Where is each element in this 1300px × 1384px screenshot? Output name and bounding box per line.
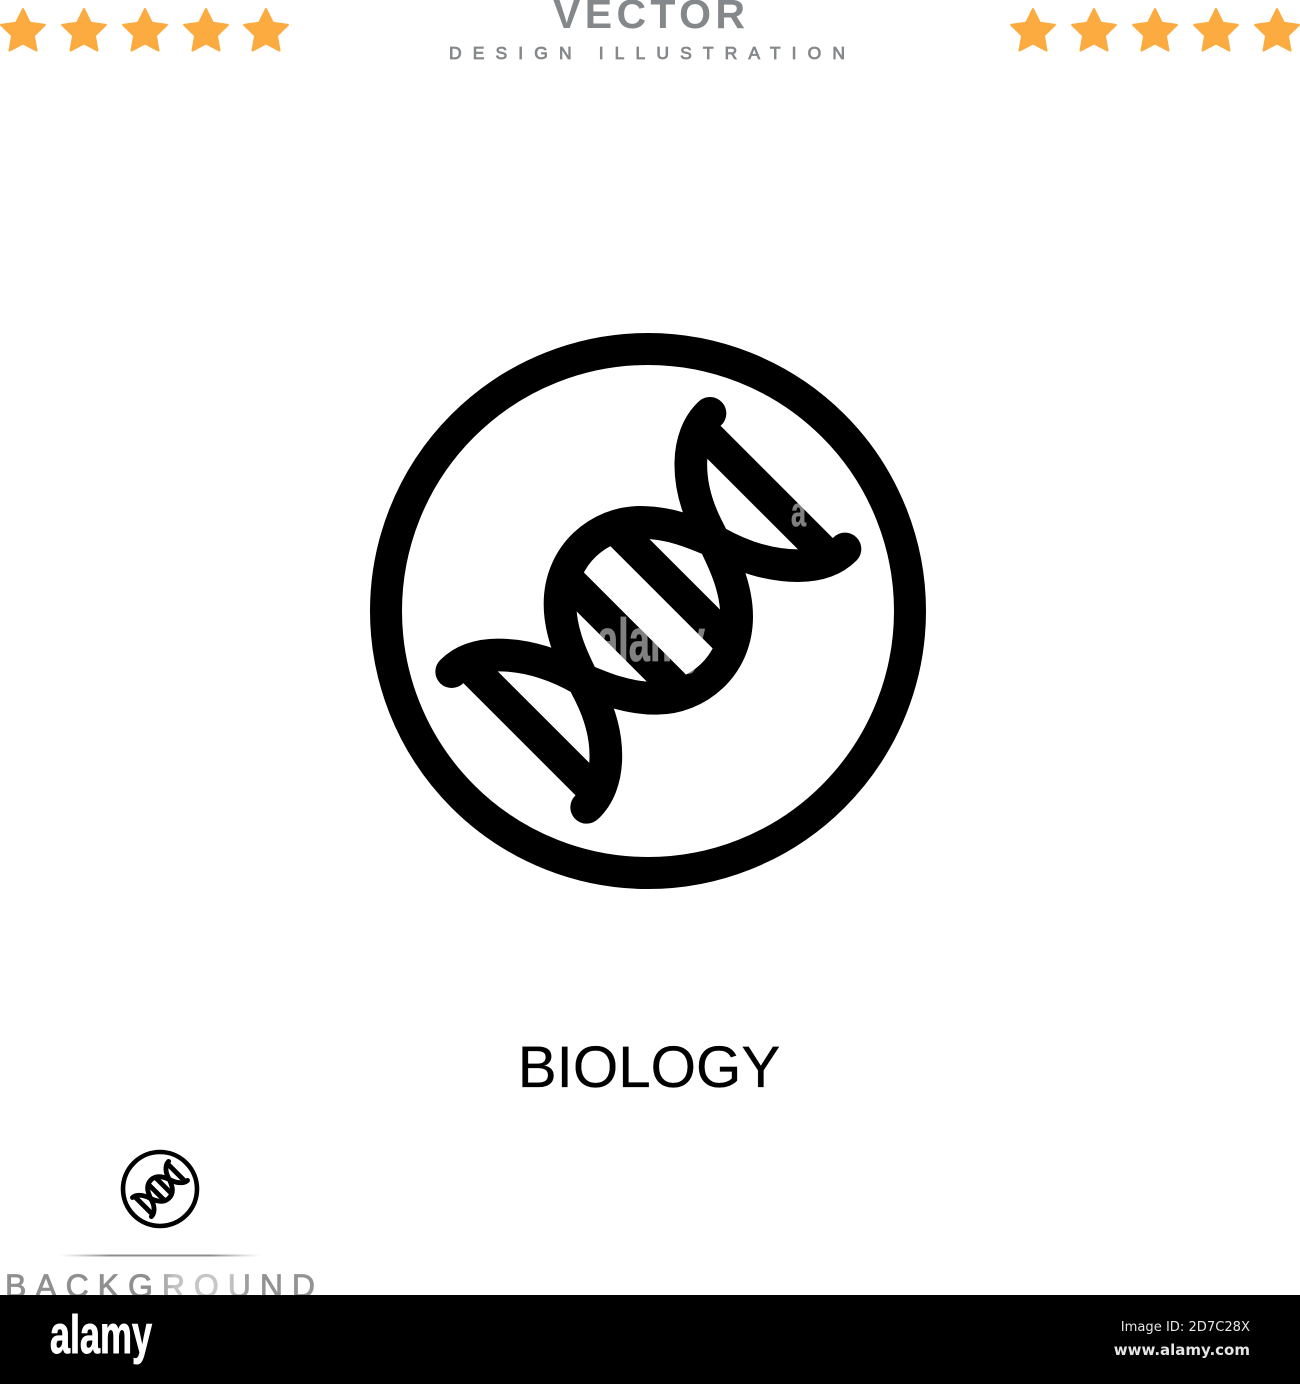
icon ring bbox=[386, 349, 910, 873]
watermark: letter a: a bbox=[791, 488, 806, 535]
small DNA helix bbox=[132, 1161, 188, 1217]
footer image id: Image ID: 2D7C28X bbox=[1121, 1320, 1250, 1335]
subheading: DESIGN ILLUSTRATION: DESIGN ILLUSTRATION bbox=[449, 43, 845, 63]
footer background bbox=[0, 1295, 1300, 1384]
footer bar bbox=[0, 1295, 1300, 1384]
DNA helix bbox=[452, 413, 845, 807]
divider rule bbox=[60, 1254, 260, 1256]
footer logo: alamy: alamy bbox=[50, 1305, 152, 1365]
footer url: www.alamy.com bbox=[1114, 1341, 1250, 1359]
right star rating bbox=[1011, 9, 1299, 51]
small icon ring bbox=[123, 1152, 197, 1226]
icon: main DNA in circle bbox=[386, 349, 910, 873]
watermark: alamy: alamy bbox=[597, 607, 705, 674]
left star rating bbox=[1, 9, 288, 51]
title: BIOLOGY: BIOLOGY bbox=[518, 1035, 780, 1100]
icon: small DNA in circle bbox=[123, 1152, 197, 1226]
label: BACKGROUND: BACKGROUND bbox=[5, 1268, 315, 1304]
